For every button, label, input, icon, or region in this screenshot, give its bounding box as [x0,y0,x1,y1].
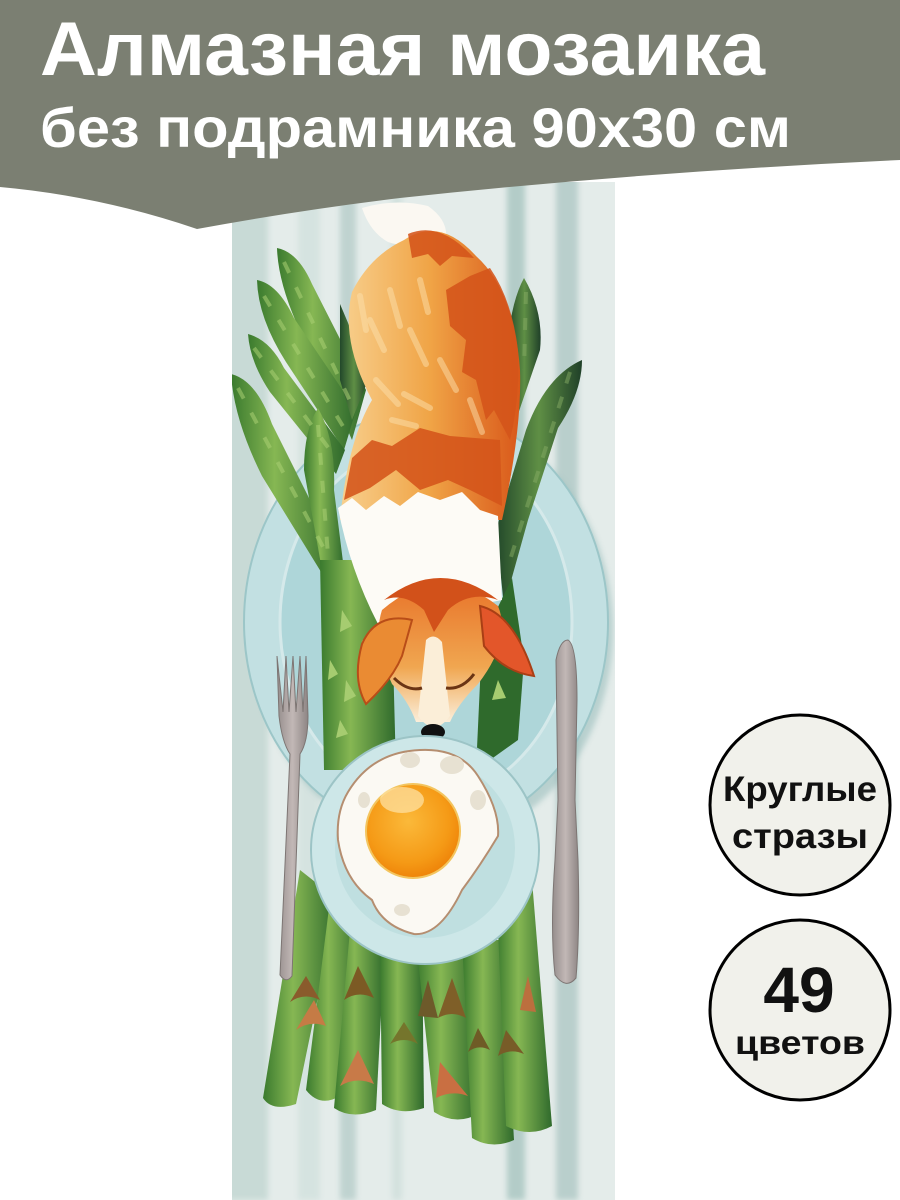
closed eyes [394,674,474,689]
subtitle: без подрамника 90х30 см [40,96,791,159]
egg yolk [366,784,460,878]
title: Алмазная мозаика [40,7,766,92]
painting background with table stripes [226,170,615,1200]
large plate [243,423,615,810]
dog body [340,231,520,520]
yolk highlight [380,787,424,813]
head markings [384,578,498,632]
dog fur strokes [360,280,482,432]
badge: round rhinestones: Круглые [723,770,877,809]
badge: 49 colours: цветов [735,1024,865,1061]
badge: round rhinestones: стразы [732,817,868,856]
corgi [338,202,534,740]
header banner [0,0,900,229]
badge: 49 colours [710,920,890,1100]
right ear [480,606,534,676]
small plate [311,736,539,964]
dog head [379,596,501,722]
left ear [358,618,412,704]
lower asparagus stalks [263,870,552,1145]
egg bubbles [358,752,486,916]
dog fur patches [344,230,518,506]
painting: corgi and asparagus diamond mosaic [226,170,615,1200]
white collar [338,492,502,624]
nose [421,724,445,736]
badge: 49 colours: 49 [763,954,835,1026]
knife [552,640,579,983]
upper asparagus spears [231,248,582,770]
muzzle [418,636,450,727]
fried egg [338,750,498,934]
fork [277,656,308,980]
tail [362,202,446,245]
badge: round rhinestones [710,715,890,895]
